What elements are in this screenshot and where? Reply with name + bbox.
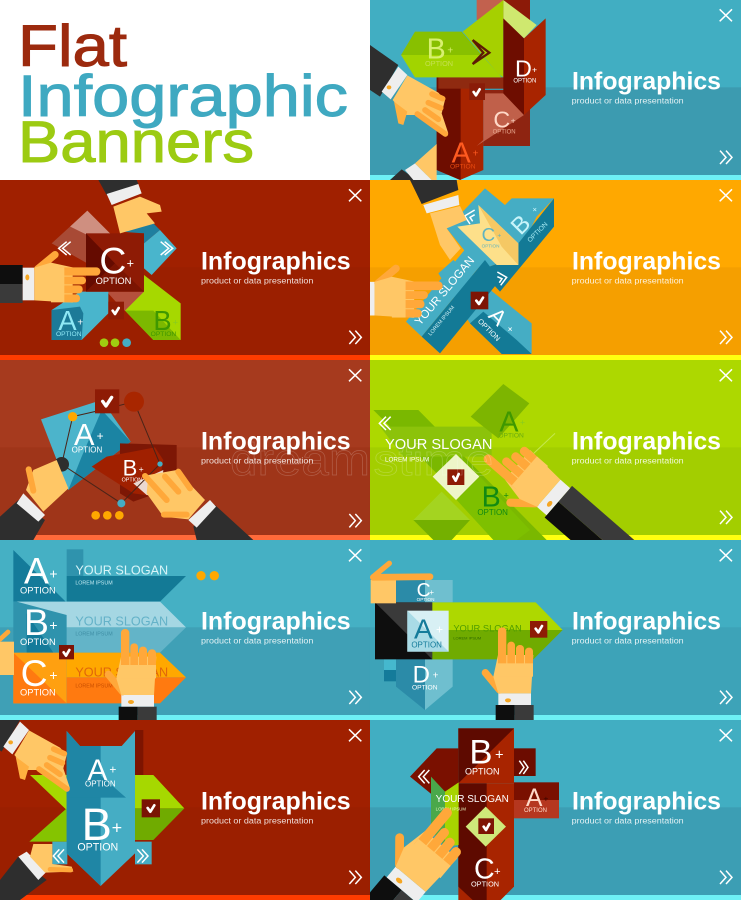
heading: Infographics — [201, 787, 351, 815]
option labels: OPTION — [450, 164, 476, 171]
icon: close — [720, 369, 732, 381]
option labels — [412, 204, 550, 343]
banner 4: rust network — [0, 360, 370, 540]
title — [18, 14, 348, 175]
heading: Infographics — [572, 427, 721, 455]
option labels — [425, 33, 537, 171]
hand: top left — [371, 563, 430, 603]
row C — [13, 652, 186, 703]
option labels: A — [74, 418, 95, 452]
option labels: B — [427, 33, 446, 65]
option labels: OPTION — [85, 780, 116, 789]
subtitle: product or data presentation — [572, 277, 684, 286]
diamond checkbox — [433, 454, 479, 500]
subtitle: product or data presentation — [201, 637, 313, 646]
option labels: + — [139, 464, 144, 474]
icons: arrows — [53, 849, 148, 863]
hand: right pointing — [473, 430, 644, 589]
option labels: B — [506, 210, 536, 240]
option labels: D — [515, 56, 532, 82]
option labels: A — [526, 785, 543, 812]
row B: OPTION — [20, 637, 56, 647]
option labels: OPTION — [465, 766, 499, 776]
row C: LOREM IPSUM — [75, 683, 113, 689]
option labels: OPTION — [151, 331, 176, 338]
option labels: + — [97, 429, 104, 443]
option labels: + — [543, 794, 548, 804]
orange dots — [196, 571, 219, 580]
option labels: + — [433, 670, 439, 681]
hand: left edge — [0, 632, 14, 675]
checkbox — [108, 302, 124, 319]
icon: close — [349, 189, 361, 201]
banner 7: teal green arrow — [370, 540, 741, 792]
option labels: + — [494, 866, 501, 878]
option labels: B — [153, 305, 172, 336]
banner 5: green — [370, 360, 741, 589]
option labels: + — [112, 817, 122, 837]
hand: upper left — [0, 700, 70, 789]
heading: Infographics — [201, 247, 351, 275]
icon: chevron — [473, 40, 489, 64]
slogan: YOUR SLOGAN — [385, 437, 493, 453]
heading: Infographics — [572, 787, 721, 815]
banner 1: teal with four-option arrows — [370, 0, 741, 180]
hand: left pointing — [370, 264, 443, 318]
banner 2: dark red — [0, 180, 370, 360]
subtitle: product or data presentation — [572, 457, 684, 466]
icon: next — [349, 331, 361, 344]
hand: bottom — [390, 144, 437, 180]
row B: B — [24, 601, 49, 643]
row C: + — [49, 667, 58, 683]
row C: OPTION — [20, 687, 56, 697]
option labels: A — [499, 407, 519, 439]
icon: back — [379, 417, 391, 430]
option labels: OPTION — [498, 432, 524, 439]
option labels: OPTION — [526, 221, 550, 244]
heading: Infographics — [201, 607, 351, 635]
option labels: + — [127, 256, 134, 270]
option labels: C — [474, 853, 495, 885]
option labels: OPTION — [417, 597, 435, 602]
option labels: OPTION — [482, 243, 500, 248]
sleeve: bottom left — [370, 875, 413, 900]
option labels: OPTION — [411, 640, 442, 649]
option labels: + — [505, 324, 516, 335]
option labels — [411, 581, 443, 691]
slogan — [436, 794, 509, 812]
orange dots — [91, 511, 124, 520]
title: Banners — [18, 110, 254, 175]
option labels: + — [436, 622, 443, 636]
heading: Infographics — [201, 427, 351, 455]
subtitle: product or data presentation — [201, 277, 313, 286]
banner 3: orange — [370, 180, 741, 360]
icon: next — [720, 511, 732, 524]
icon: next — [349, 691, 361, 704]
icon: close — [720, 729, 732, 741]
option labels: + — [497, 232, 501, 239]
option labels: A — [58, 305, 77, 336]
icon: next — [349, 514, 361, 527]
subtitle: product or data presentation — [572, 817, 684, 826]
hand: left — [0, 460, 68, 540]
option labels: C — [493, 106, 510, 132]
hand: upper left — [370, 45, 448, 134]
hand: lower left — [0, 844, 73, 900]
hand: pointing up — [485, 627, 534, 792]
option labels: + — [520, 417, 525, 427]
checkbox — [471, 292, 488, 309]
option labels: OPTION — [77, 842, 118, 854]
option labels — [477, 407, 525, 517]
icon: next — [720, 151, 732, 164]
row A: YOUR SLOGAN — [75, 564, 168, 578]
row C: YOUR SLOGAN — [75, 666, 168, 680]
row B: YOUR SLOGAN — [75, 614, 168, 628]
slogan: LOREM IPSUM — [436, 807, 466, 812]
option labels: C — [482, 224, 495, 245]
diamond checkbox — [466, 807, 506, 847]
option labels: + — [173, 317, 178, 327]
icon: close — [349, 729, 361, 741]
hand: right — [145, 470, 253, 540]
slogan — [385, 437, 493, 464]
option labels: + — [77, 317, 83, 328]
network nodes — [54, 392, 163, 507]
option labels — [465, 733, 548, 889]
slogan: LOREM IPSUM — [385, 457, 429, 464]
hand: top — [410, 180, 467, 260]
option labels: OPTION — [476, 317, 502, 343]
option labels: LOREM IPSUM — [428, 305, 456, 337]
heading: Infographics — [572, 607, 721, 635]
option labels: C — [417, 581, 431, 602]
option labels: + — [511, 115, 516, 125]
row A: + — [49, 565, 58, 581]
hand: top — [98, 180, 162, 233]
banner 6: teal three rows — [0, 540, 370, 793]
option labels: OPTION — [493, 129, 516, 135]
title: Flat — [18, 14, 127, 79]
icon: close — [720, 9, 732, 21]
banner 8: dark red double arrow — [0, 700, 370, 900]
option labels: D — [413, 662, 430, 689]
option labels: A — [87, 754, 107, 787]
option labels: + — [447, 45, 453, 56]
icon: next — [720, 871, 732, 884]
title: Infographic — [18, 64, 348, 129]
icon: close — [720, 189, 732, 201]
option labels — [77, 754, 122, 854]
subtitle: product or data presentation — [201, 457, 313, 466]
subtitle: product or data presentation — [572, 637, 684, 646]
checkbox — [59, 645, 74, 659]
icon: close — [720, 549, 732, 561]
hand: pointing up — [108, 629, 157, 793]
option labels: C — [99, 239, 126, 281]
checkbox — [142, 799, 160, 817]
option labels: OPTION — [513, 79, 536, 85]
option labels: OPTION — [56, 331, 82, 338]
option labels: + — [495, 747, 504, 763]
icon: close — [349, 369, 361, 381]
subtitle: product or data presentation — [572, 97, 684, 106]
option labels: OPTION — [425, 59, 453, 68]
heading: Infographics — [572, 67, 721, 95]
option labels: B — [82, 799, 112, 850]
icon: next — [349, 871, 361, 884]
option labels: OPTION — [524, 808, 547, 814]
hand: bottom left pointing — [375, 796, 479, 900]
slogan — [453, 623, 522, 640]
banner 9: teal red cross — [370, 720, 741, 900]
icon: close — [349, 549, 361, 561]
row A: A — [24, 549, 49, 591]
option labels: OPTION — [412, 684, 438, 691]
checkbox — [530, 621, 547, 638]
network lines — [62, 402, 160, 503]
option labels: + — [503, 490, 509, 500]
option labels: OPTION — [477, 508, 508, 517]
heading: Infographics — [572, 247, 721, 275]
checkbox — [469, 83, 485, 100]
row A — [13, 549, 186, 602]
option labels: B — [123, 455, 137, 480]
option labels: OPTION — [72, 446, 103, 455]
slogan: YOUR SLOGAN — [436, 794, 509, 805]
watermark: dream — [230, 434, 370, 485]
hand: left pointing — [0, 255, 100, 303]
slogan: YOUR SLOGAN — [453, 623, 522, 633]
icon: next — [720, 331, 732, 344]
icons: arrows — [419, 761, 528, 783]
icons: arrows — [59, 242, 173, 255]
option labels: A — [452, 137, 472, 169]
option labels: OPTION — [122, 477, 142, 483]
row B: LOREM IPSUM — [75, 631, 113, 637]
option labels: + — [532, 65, 537, 75]
option labels: + — [109, 762, 116, 776]
option labels: OPTION — [96, 276, 131, 286]
row B — [13, 601, 186, 653]
option labels: A — [484, 303, 512, 331]
row A: OPTION — [20, 585, 56, 595]
row B: + — [49, 617, 58, 633]
option labels: B — [482, 482, 501, 514]
option labels: B — [469, 733, 492, 771]
icon: next — [720, 691, 732, 704]
option labels — [56, 248, 178, 336]
option labels: OPTION — [471, 880, 499, 889]
option labels: + — [529, 204, 540, 215]
option labels: A — [414, 613, 433, 644]
option labels: + — [473, 149, 479, 160]
pagination dots — [100, 338, 131, 347]
slogan: LOREM IPSUM — [453, 635, 481, 640]
watermark: stime — [373, 437, 493, 485]
icons: arrows — [465, 210, 507, 285]
checkbox — [95, 389, 119, 413]
option labels — [72, 424, 144, 482]
row C: C — [21, 652, 48, 694]
subtitle: product or data presentation — [201, 817, 313, 826]
row A: LOREM IPSUM — [75, 581, 113, 587]
option labels: YOUR SLOGAN — [412, 254, 477, 328]
option labels: + — [429, 588, 434, 597]
